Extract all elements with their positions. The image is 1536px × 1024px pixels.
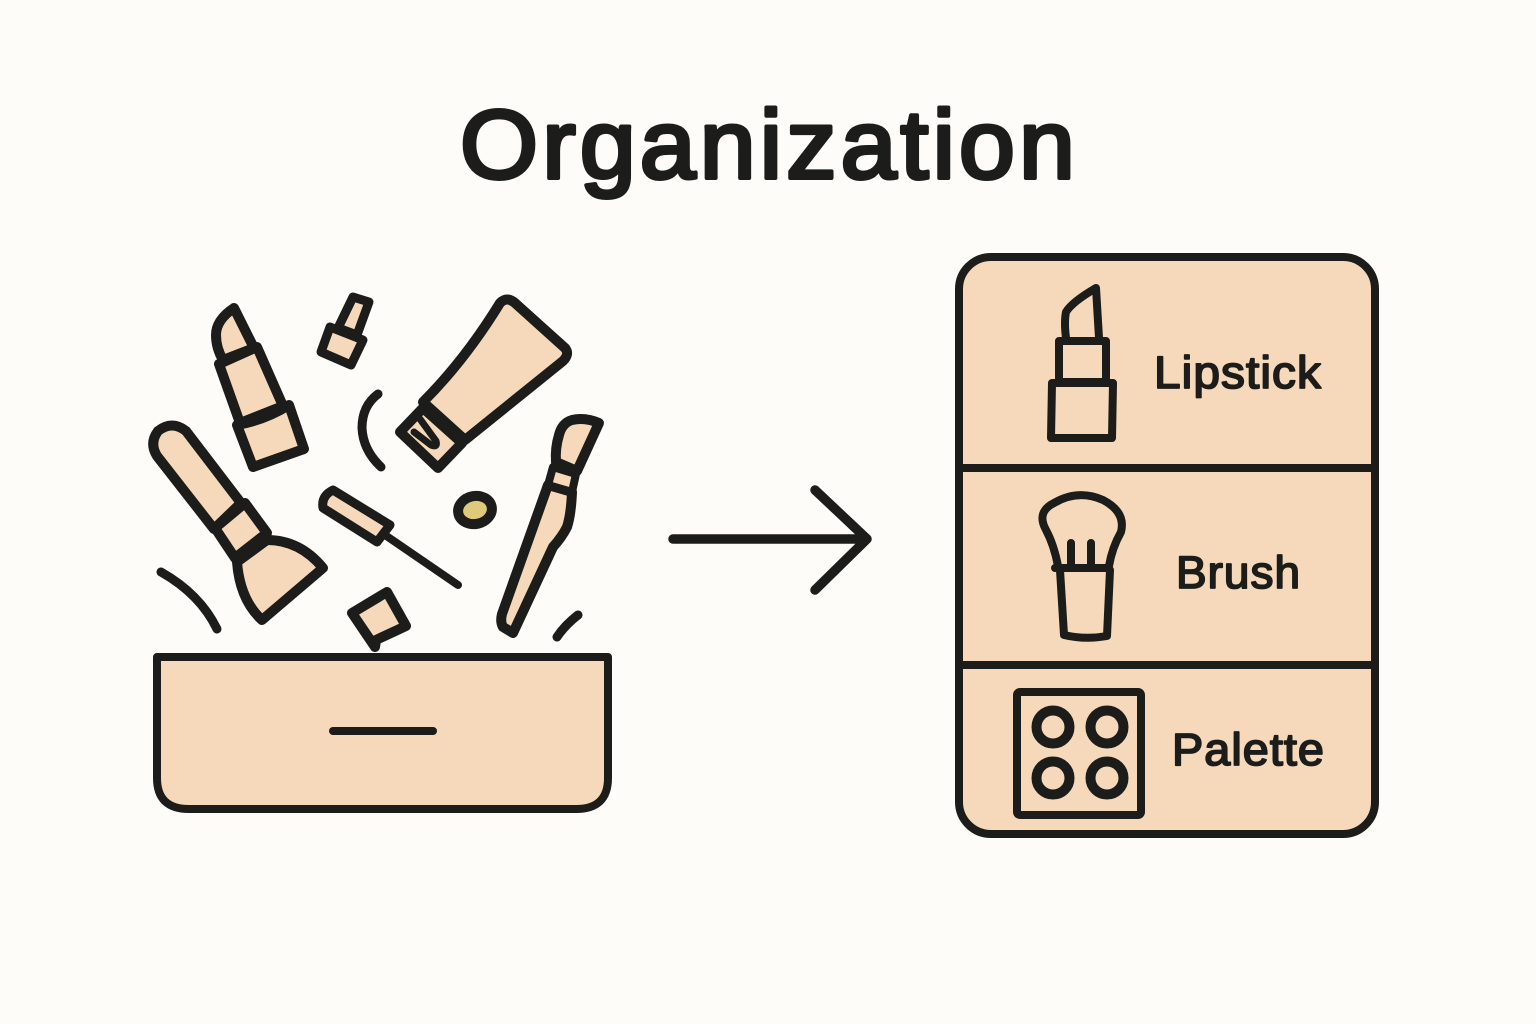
row: brush (1042, 495, 1301, 638)
panel: messy items falling into drawer (153, 297, 608, 809)
row: lipstick (1051, 288, 1322, 438)
icon: scattered swoosh (161, 572, 217, 629)
label: lipstick: Lipstick (1154, 347, 1322, 398)
icon: slim brush (501, 419, 599, 633)
icon: scattered dash (557, 615, 578, 637)
icon: mascara wand (323, 490, 458, 585)
title: Organization (460, 90, 1079, 199)
label: brush: Brush (1176, 547, 1301, 598)
icon: scattered arc (362, 394, 381, 467)
icon: tilted lipstick (216, 308, 304, 467)
icon: palette (1017, 692, 1141, 815)
arrow (673, 490, 867, 590)
icon: olive blob (455, 493, 495, 527)
label: palette: Palette (1172, 724, 1325, 775)
icon: small square (352, 592, 406, 647)
icon: makeup brush (153, 426, 323, 620)
icon: lipstick (1051, 288, 1113, 438)
row: palette (1017, 692, 1325, 815)
panel: organized tray (959, 257, 1375, 834)
icon: tube (400, 300, 567, 468)
icon: nail polish (321, 297, 369, 365)
drawer (157, 657, 608, 809)
icon: brush (1042, 495, 1122, 638)
